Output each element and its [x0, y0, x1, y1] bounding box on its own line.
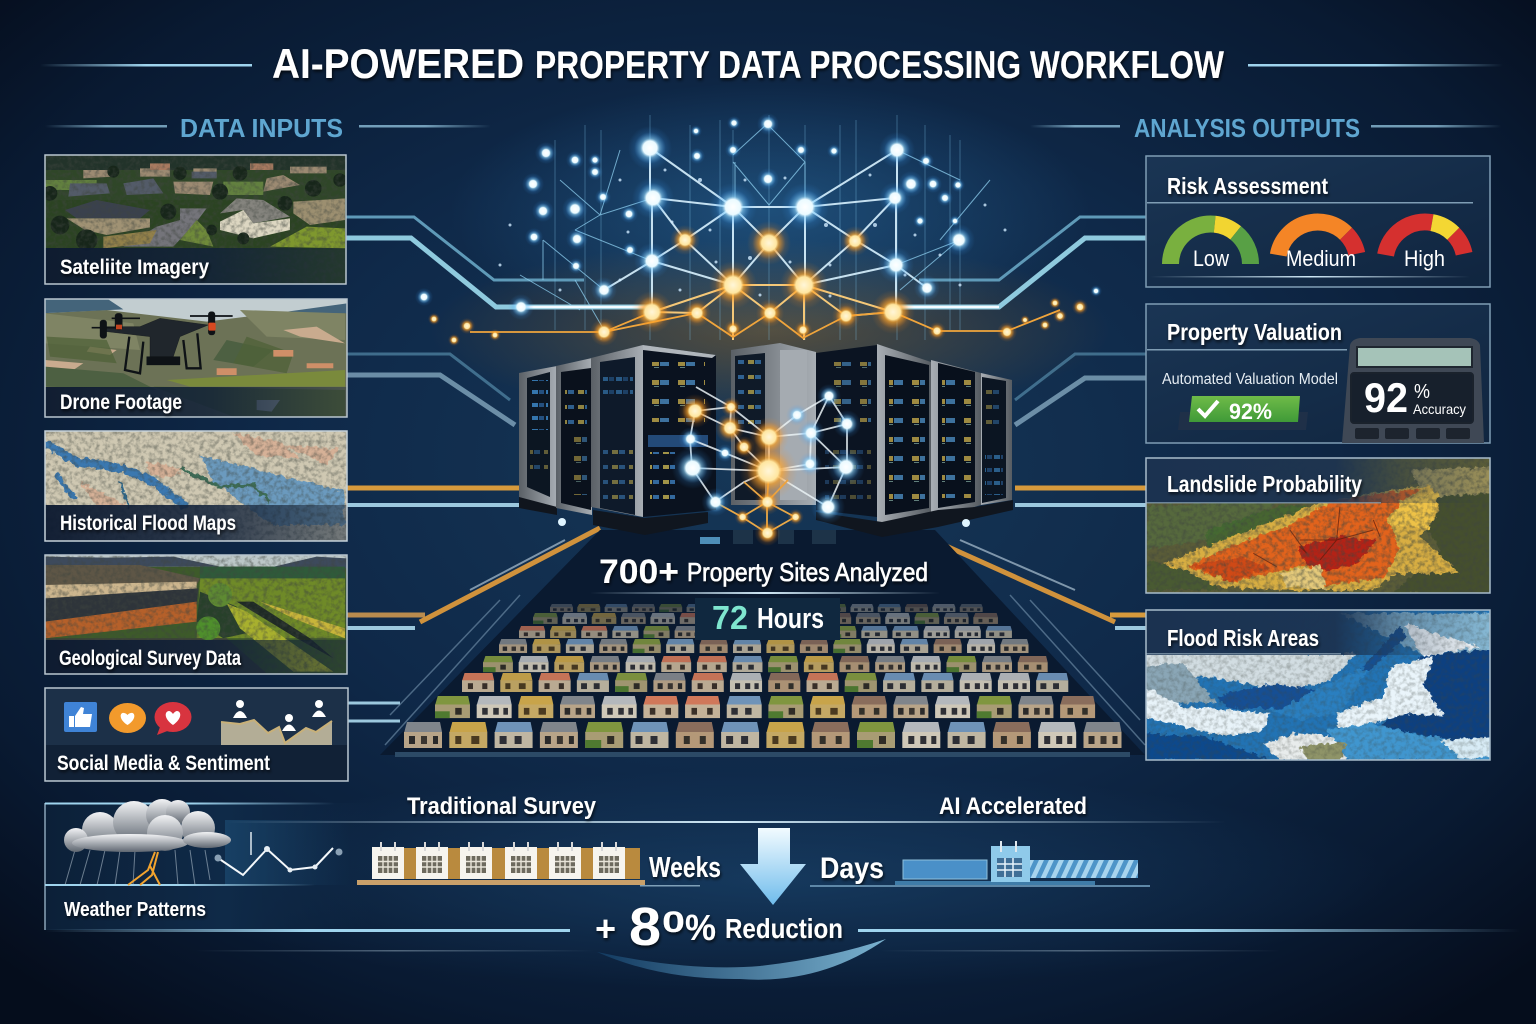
sentiment chart	[221, 700, 332, 745]
reduction callout: Reduction	[725, 913, 843, 944]
arrow: down reduction	[740, 828, 806, 905]
accuracy badge: 92%	[1229, 399, 1272, 424]
calculator: Accuracy	[1413, 401, 1466, 417]
calendars: weeks	[357, 842, 700, 886]
title	[272, 40, 1224, 87]
panel: flood risk areas: Flood Risk Areas	[1167, 625, 1319, 651]
server front small glow devices	[558, 518, 970, 544]
reduction callout: 0	[662, 906, 685, 939]
left big cabinet	[591, 345, 716, 535]
panel: historical flood maps	[40, 430, 360, 542]
panel: landslide probability: Landslide Probability	[1167, 471, 1362, 497]
panel: flood risk areas	[1140, 610, 1500, 760]
network links blue	[604, 148, 927, 312]
days timeline	[810, 841, 1150, 887]
panel: property valuation: Property Valuation	[1167, 319, 1342, 345]
reduction callout: %	[685, 907, 716, 948]
left far cabinet	[519, 366, 557, 515]
small data dots	[498, 168, 1006, 298]
label: traditional survey: Traditional Survey	[407, 793, 597, 820]
panel: geological survey data: Geological Survey Data	[59, 647, 241, 670]
panel: risk assessment: Risk Assessment	[1167, 173, 1328, 199]
stat: 700+ sites analyzed	[599, 553, 928, 591]
gauge: high: High	[1404, 246, 1445, 271]
gauge: low	[1170, 224, 1250, 271]
stat: 72 hours: 72	[712, 599, 748, 636]
property site grid	[404, 604, 1122, 748]
neural network	[415, 113, 1102, 346]
title: PROPERTY DATA PROCESSING WORKFLOW	[535, 44, 1224, 87]
central glow	[150, 80, 1390, 990]
stat: 72 hours: Hours	[757, 603, 824, 635]
panel: social media & sentiment: Social Media & Sentiment	[57, 752, 270, 775]
right second cabinet	[931, 360, 981, 520]
gauge: low: Low	[1193, 246, 1229, 271]
panel: landslide probability	[1140, 450, 1500, 597]
icon: red heart bubble	[154, 702, 192, 735]
center cabinet	[731, 343, 816, 505]
label: weeks: Weeks	[649, 852, 721, 884]
stat: 700+ sites analyzed: 700+	[599, 553, 679, 591]
panel: historical flood maps: Historical Flood Maps	[60, 512, 236, 535]
stat: 700+ sites analyzed: Property Sites Analyzed	[687, 557, 928, 587]
data rain lines	[555, 115, 960, 340]
stat: 72 hours	[695, 598, 840, 640]
panel: drone footage: Drone Footage	[60, 391, 182, 414]
server racks	[519, 343, 1013, 544]
panel: property valuation: Automated Valuation Model	[1162, 371, 1338, 388]
right big cabinet	[816, 344, 931, 530]
left second cabinet	[556, 358, 592, 515]
panel: weather patterns: Weather Patterns	[64, 899, 206, 921]
panel: drone footage	[40, 298, 360, 418]
icon: orange heart bubble	[109, 703, 146, 733]
panel: satellite imagery: Sateliite Imagery	[60, 256, 209, 279]
weather line chart	[214, 832, 342, 875]
label: days: Days	[820, 852, 884, 885]
panel: property valuation	[1146, 304, 1490, 443]
icon: thumbs up	[64, 702, 97, 732]
panel: risk assessment	[1146, 156, 1490, 287]
panel: geological survey data	[40, 555, 360, 675]
panel: satellite imagery	[40, 150, 360, 290]
calculator	[1342, 338, 1484, 443]
accuracy badge	[1178, 396, 1308, 430]
blue nodes	[415, 113, 1102, 320]
front mini network	[672, 384, 865, 546]
title: AI-POWERED	[272, 40, 524, 87]
gauge: high	[1386, 222, 1464, 271]
gauge: medium	[1278, 222, 1357, 271]
panel: weather patterns	[45, 799, 375, 930]
label: ai accelerated: AI Accelerated	[939, 793, 1087, 820]
heading: data inputs: DATA INPUTS	[180, 113, 343, 143]
network links orange	[652, 285, 893, 340]
gauge: medium: Medium	[1286, 246, 1356, 271]
floor perspective	[380, 530, 1145, 755]
calculator: 92	[1364, 374, 1408, 421]
calculator: %	[1414, 381, 1430, 403]
circuit connectors	[346, 217, 1146, 721]
reduction callout	[595, 897, 843, 957]
right far cabinet	[981, 373, 1012, 505]
reduction callout: +	[595, 908, 616, 949]
reduction callout: 8	[629, 897, 661, 957]
reduction arc	[597, 939, 886, 980]
icon: storm cloud	[64, 799, 231, 885]
heading: analysis outputs: ANALYSIS OUTPUTS	[1134, 113, 1360, 143]
right base	[816, 500, 1013, 537]
orange nodes	[428, 221, 1088, 346]
panel: social media & sentiment	[45, 688, 348, 781]
